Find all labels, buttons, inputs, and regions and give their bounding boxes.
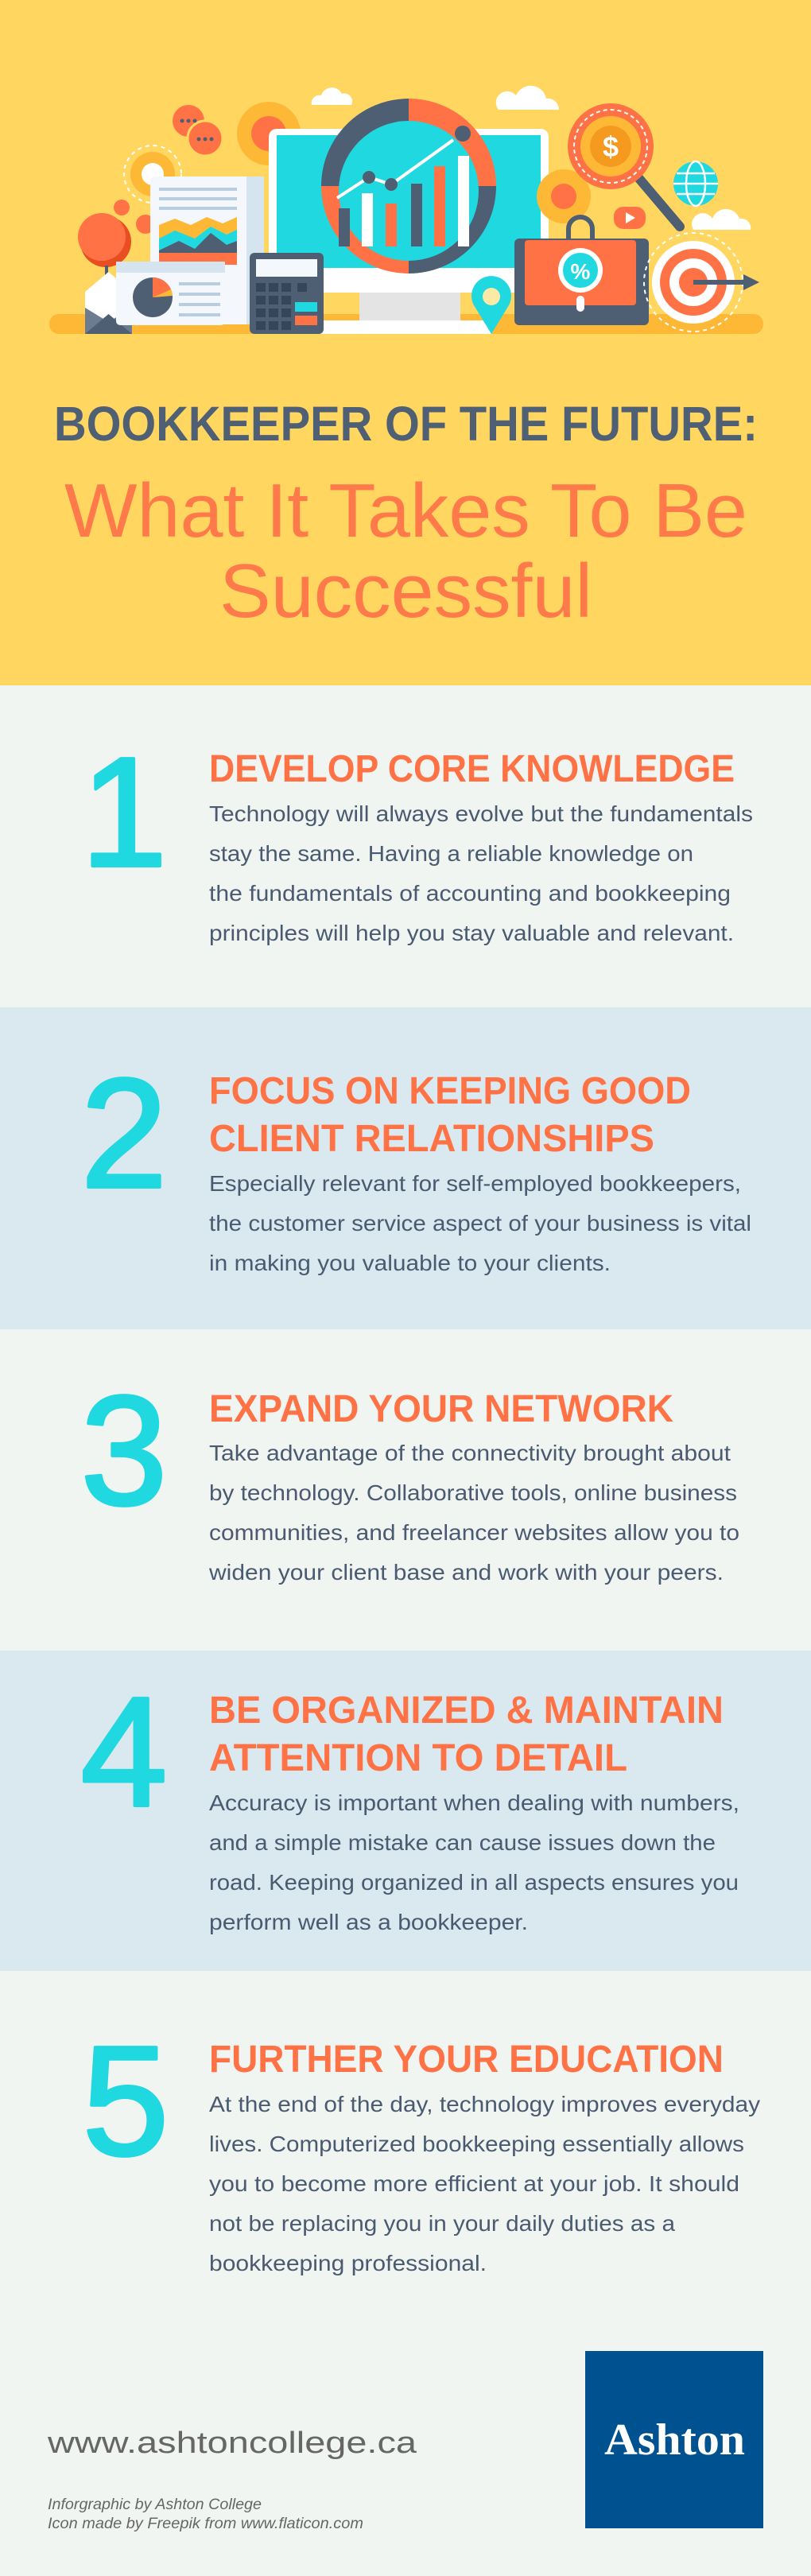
icon: document front [116, 262, 225, 325]
title [54, 397, 758, 634]
bar chart [337, 126, 471, 246]
icon: globe [673, 161, 718, 206]
body 2: Especially relevant for self-employed bookkeepers, [209, 1171, 741, 1196]
body 3: widen your client base and work with your peers. [208, 1560, 724, 1585]
title: BOOKKEEPER OF THE FUTURE: [54, 397, 758, 451]
body 2: in making you valuable to your clients. [209, 1251, 611, 1275]
number 1: 1 [80, 725, 168, 899]
icon: envelope [85, 272, 132, 334]
logo: Ashton: Ashton [604, 2415, 745, 2465]
heading 2 [209, 1070, 691, 1160]
body 4: perform well as a bookkeeper. [209, 1910, 528, 1934]
icon: chat bubbles [173, 105, 223, 156]
subtitle [64, 468, 747, 634]
body 1: stay the same. Having a reliable knowledge on [209, 841, 693, 866]
number 3: 3 [80, 1364, 168, 1538]
section backgrounds [0, 685, 811, 2576]
body 5: you to become more efficient at your job. It should [209, 2171, 739, 2196]
body 3: by technology. Collaborative tools, online business [209, 1480, 737, 1505]
heading 4 [209, 1690, 724, 1779]
heading 4: BE ORGANIZED & MAINTAIN [209, 1690, 724, 1732]
heading 2: FOCUS ON KEEPING GOOD [209, 1070, 691, 1112]
body 2: the customer service aspect of your business is vital [209, 1211, 751, 1236]
number 4: 4 [80, 1665, 168, 1839]
icon: left gear [237, 102, 301, 165]
body 1: Technology will always evolve but the fundamentals [209, 801, 753, 826]
heading 1: DEVELOP CORE KNOWLEDGE [209, 748, 735, 790]
body 5: not be replacing you in your daily duties as a [209, 2211, 675, 2236]
heading 5: FURTHER YOUR EDUCATION [209, 2039, 724, 2081]
body 4 [209, 1790, 739, 1934]
icon: magnifier coin: $ [603, 130, 619, 163]
icon: briefcase: % [571, 259, 591, 284]
body 1: principles will help you stay valuable and relevant. [209, 921, 734, 945]
icon: play button [614, 207, 646, 229]
subtitle: What It Takes To Be [64, 468, 747, 553]
header illustration [49, 86, 763, 334]
body 1: the fundamentals of accounting and bookkeeping [209, 881, 731, 906]
icon: clouds [312, 86, 751, 230]
subtitle: Successful [219, 549, 592, 634]
panel: step 2 [80, 1046, 751, 1275]
panel: step 4 [80, 1665, 739, 1934]
icon: target [644, 233, 759, 332]
heading 3: EXPAND YOUR NETWORK [209, 1388, 673, 1430]
number 2: 2 [80, 1046, 168, 1220]
footer credits [48, 2496, 363, 2532]
panel: step 3 [80, 1364, 739, 1585]
body 3: Take advantage of the connectivity brought about [209, 1441, 731, 1465]
icon: briefcase [514, 217, 649, 325]
header background [0, 0, 811, 685]
body 5: At the end of the day, technology improves everyday [209, 2092, 760, 2116]
icon: monitor [269, 99, 549, 334]
icon: right gear [537, 169, 591, 223]
icon: document back [150, 177, 264, 324]
icon: magnifier coin [568, 103, 680, 227]
icon: small gear [124, 145, 181, 203]
icon: calculator [250, 253, 324, 334]
footer url: www.ashtoncollege.ca [47, 2427, 417, 2460]
number 5: 5 [82, 2014, 169, 2188]
body 4: Accuracy is important when dealing with numbers, [209, 1790, 739, 1815]
body 4: road. Keeping organized in all aspects ensures you [209, 1870, 739, 1895]
footer credits: Icon made by Freepik from www.flaticon.com [48, 2516, 363, 2532]
body 3: communities, and freelancer websites allow you to [209, 1520, 739, 1545]
body 5 [209, 2092, 760, 2275]
body 5: bookkeeping professional. [209, 2251, 487, 2275]
body 1 [209, 801, 753, 945]
panel: step 5 [82, 2014, 760, 2275]
heading 4: ATTENTION TO DETAIL [209, 1737, 627, 1779]
body 2 [209, 1171, 751, 1275]
logo: Ashton [585, 2351, 763, 2528]
donut chart [321, 99, 496, 274]
footer credits: Inforgraphic by Ashton College [48, 2496, 262, 2513]
body 4: and a simple mistake can cause issues down the [209, 1830, 716, 1855]
icon: lightbulb [78, 213, 131, 294]
body 5: lives. Computerized bookkeeping essentially allows [209, 2132, 744, 2156]
icon: location pin [471, 276, 511, 334]
heading 2: CLIENT RELATIONSHIPS [209, 1118, 654, 1160]
body 3 [208, 1441, 739, 1585]
ground bar [49, 314, 763, 334]
icon: coins [114, 200, 155, 234]
panel: step 1 [80, 725, 753, 945]
